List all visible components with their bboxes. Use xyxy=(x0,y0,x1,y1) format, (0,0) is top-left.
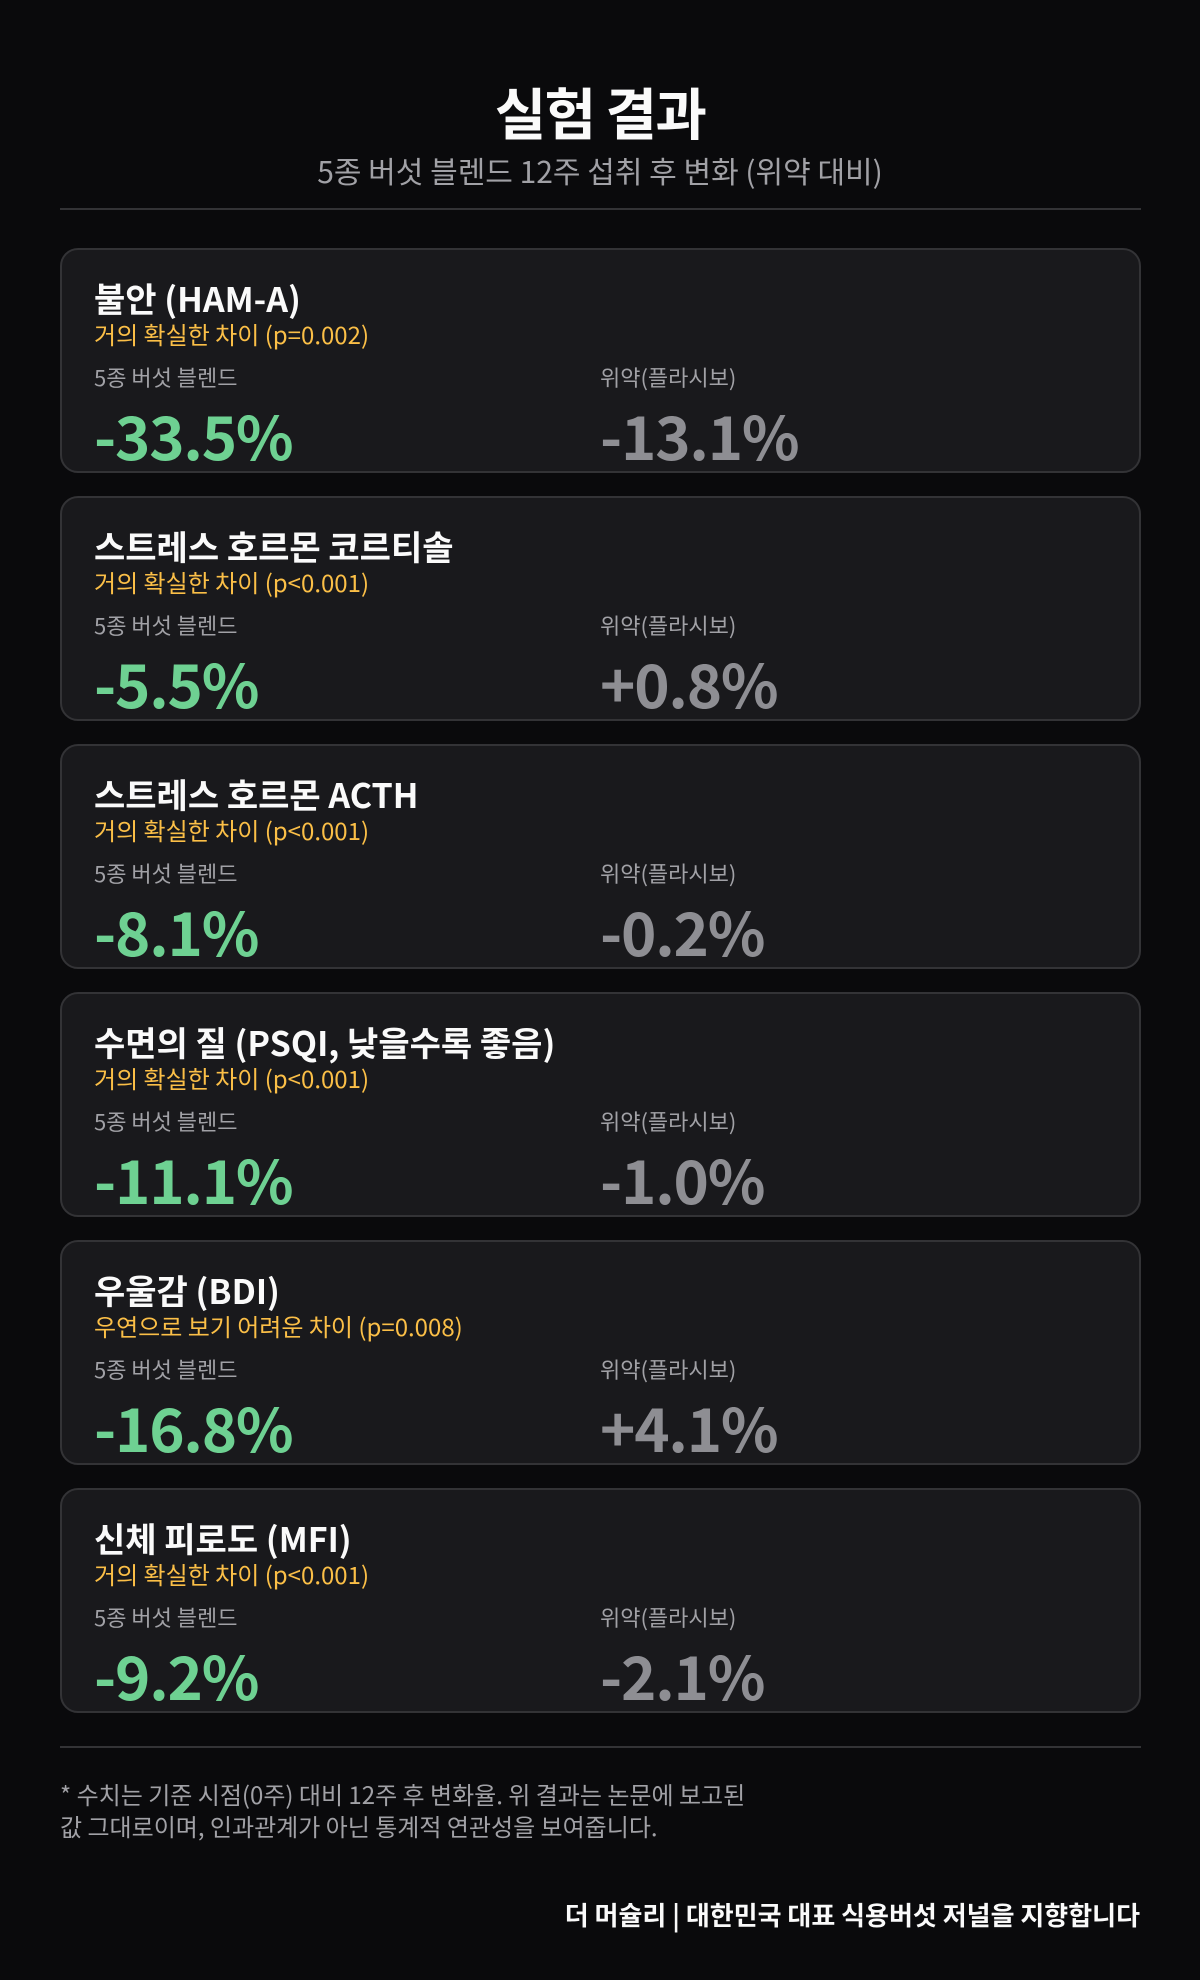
panel: depression xyxy=(60,1240,1141,1465)
significance text: 거의 확실한 차이 (p<0.001) xyxy=(94,1060,369,1095)
label: blend: 5종 버섯 블렌드 xyxy=(94,1353,238,1385)
label: blend: 5종 버섯 블렌드 xyxy=(94,857,238,889)
label: placebo: 위약(플라시보) xyxy=(600,1353,736,1385)
title: 실험 결과 xyxy=(495,71,705,152)
panel: ACTH xyxy=(60,744,1141,969)
label: placebo: 위약(플라시보) xyxy=(600,1601,736,1633)
label: blend: 5종 버섯 블렌드 xyxy=(94,361,238,393)
footnote: * 수치는 기준 시점(0주) 대비 12주 후 변화율. 위 결과는 논문에 보고된 xyxy=(60,1776,745,1811)
label: placebo: 위약(플라시보) xyxy=(600,609,736,641)
footnote xyxy=(60,1776,745,1843)
label: placebo: 위약(플라시보) xyxy=(600,361,736,393)
panel: anxiety HAM-A xyxy=(60,248,1141,473)
heading: anxiety: 불안 (HAM-A) xyxy=(94,273,301,322)
heading: depression: 우울감 (BDI) xyxy=(94,1265,280,1314)
label: blend: 5종 버섯 블렌드 xyxy=(94,1601,238,1633)
footer credit: 더 머슐리 | 대한민국 대표 식용버섯 저널을 지향합니다 xyxy=(565,1896,1140,1933)
footnote: 값 그대로이며, 인과관계가 아닌 통계적 연관성을 보여줍니다. xyxy=(60,1808,658,1843)
subtitle: 5종 버섯 블렌드 12주 섭취 후 변화 (위약 대비) xyxy=(317,148,883,192)
significance text: 거의 확실한 차이 (p<0.001) xyxy=(94,812,369,847)
label: placebo: 위약(플라시보) xyxy=(600,857,736,889)
significance text: 거의 확실한 차이 (p<0.001) xyxy=(94,1556,369,1591)
heading: ACTH: 스트레스 호르몬 ACTH xyxy=(94,769,419,818)
label: placebo: 위약(플라시보) xyxy=(600,1105,736,1137)
label: blend: 5종 버섯 블렌드 xyxy=(94,609,238,641)
label: blend: 5종 버섯 블렌드 xyxy=(94,1105,238,1137)
panel: sleep quality xyxy=(60,992,1141,1217)
significance text: 우연으로 보기 어려운 차이 (p=0.008) xyxy=(94,1308,463,1343)
panel: cortisol xyxy=(60,496,1141,721)
heading: cortisol: 스트레스 호르몬 코르티솔 xyxy=(94,521,454,570)
heading: fatigue: 신체 피로도 (MFI) xyxy=(94,1513,352,1562)
heading: sleep quality: 수면의 질 (PSQI, 낮을수록 좋음) xyxy=(94,1017,555,1066)
significance text: 거의 확실한 차이 (p<0.001) xyxy=(94,564,369,599)
significance text: 거의 확실한 차이 (p=0.002) xyxy=(94,316,369,351)
panel: fatigue xyxy=(60,1488,1141,1713)
